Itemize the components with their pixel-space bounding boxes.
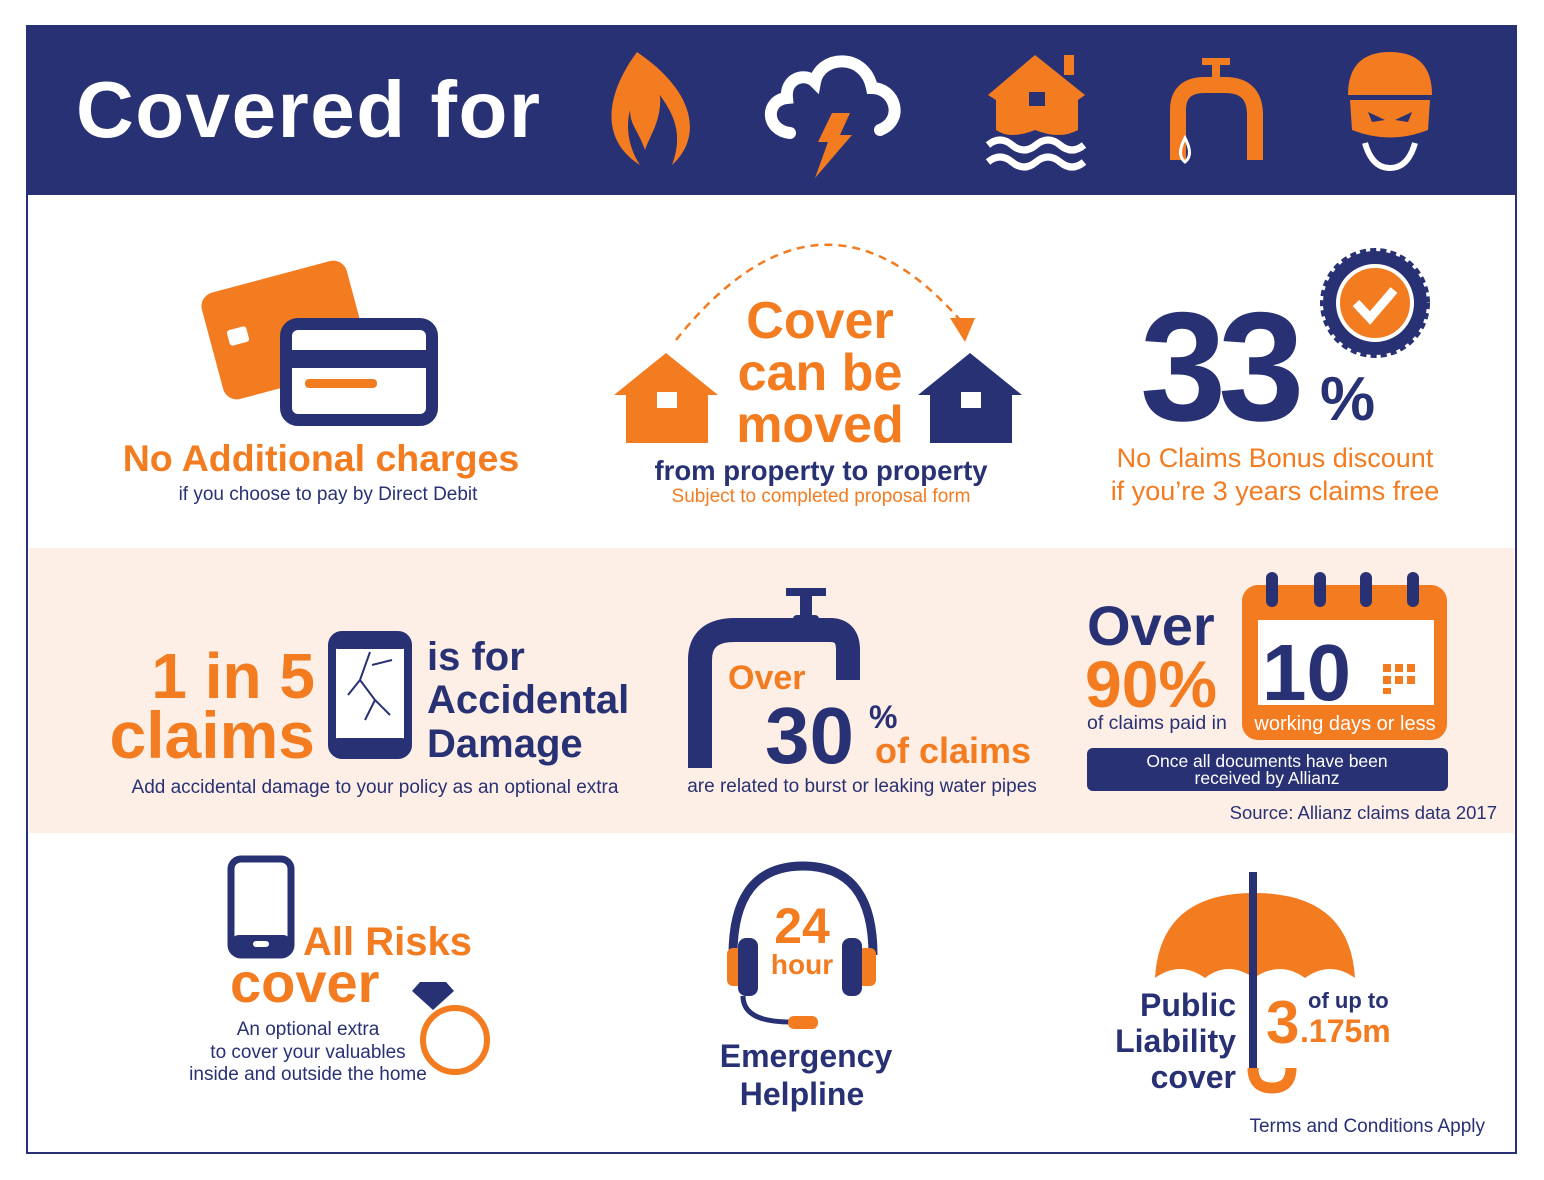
panel: 1 in 5 claims: Add accidental damage to your policy as an optional extra bbox=[132, 777, 619, 798]
panel: no additional charges bbox=[123, 257, 519, 505]
title: Covered for bbox=[76, 65, 541, 154]
arrow: dashed arc bbox=[676, 245, 975, 342]
panel: public liability: Public bbox=[1140, 987, 1236, 1023]
panel: cover can be moved: can be bbox=[738, 344, 902, 402]
icon: navy house bbox=[918, 353, 1022, 443]
callout: documents note: Once all documents have been bbox=[1146, 751, 1388, 771]
panel: over 90% paid in 10 days: Source: Allianz claims data 2017 bbox=[1230, 802, 1497, 823]
peach band bbox=[29, 548, 1514, 833]
panel: 33% no claims bonus bbox=[1111, 251, 1439, 506]
icon: diamond ring bbox=[412, 982, 487, 1072]
icon: calendar: working days or less bbox=[1253, 713, 1436, 735]
panel: 1 in 5 claims: 1 in 5 bbox=[151, 640, 315, 712]
panel: 1 in 5 claims: Damage bbox=[427, 722, 583, 766]
icon: orange house bbox=[614, 353, 718, 443]
panel: 33% no claims bonus: if you’re 3 years claims free bbox=[1111, 476, 1439, 506]
icon: burglar bbox=[1348, 52, 1432, 168]
panel: 30% of claims pipes: Over bbox=[728, 659, 806, 697]
panel: 30% of claims pipes: 30 bbox=[765, 691, 854, 780]
panel: 24 hour emergency helpline: Helpline bbox=[740, 1076, 864, 1112]
panel: public liability bbox=[1115, 872, 1485, 1137]
panel: all risks cover: All Risks bbox=[303, 920, 472, 964]
panel: 30% of claims pipes: are related to burst or leaking water pipes bbox=[687, 776, 1037, 797]
icon: umbrella bbox=[1155, 872, 1355, 1088]
panel: 30% of claims pipes: % bbox=[869, 699, 897, 735]
icon: headset bbox=[727, 866, 876, 1029]
panel: no additional charges: No Additional charges bbox=[123, 437, 519, 479]
header bbox=[27, 26, 1516, 195]
panel: public liability: of up to bbox=[1308, 988, 1389, 1013]
panel: cover can be moved: moved bbox=[736, 396, 904, 454]
panel: over 90% paid in 10 days: of claims paid in bbox=[1087, 712, 1227, 734]
panel: 1 in 5 claims: Accidental bbox=[427, 678, 629, 722]
icon: dripping tap bbox=[1178, 58, 1255, 162]
panel: 24 hour emergency helpline: Emergency bbox=[720, 1038, 892, 1074]
callout: documents note: received by Allianz bbox=[1195, 768, 1339, 788]
icon: cracked phone bbox=[332, 635, 408, 755]
panel: all risks cover: inside and outside the home bbox=[189, 1064, 427, 1085]
panel: over 90% paid in 10 days bbox=[1085, 572, 1497, 823]
panel: cover can be moved: Subject to completed proposal form bbox=[672, 486, 970, 507]
panel: all risks cover bbox=[189, 859, 487, 1085]
panel: 33% no claims bonus: No Claims Bonus discount bbox=[1117, 443, 1434, 473]
panel: 1 in 5 claims: claims bbox=[110, 698, 315, 772]
icon: tap pipe bbox=[700, 588, 848, 768]
panel: cover can be moved: from property to property bbox=[654, 455, 988, 486]
panel: cover can be moved: Cover bbox=[746, 292, 894, 350]
panel: 24 hour emergency helpline: 24 bbox=[774, 898, 830, 954]
panel: cover can be moved bbox=[614, 245, 1022, 507]
panel: public liability: cover bbox=[1151, 1059, 1236, 1095]
icon: calendar: 10 bbox=[1262, 628, 1351, 717]
panel: all risks cover: cover bbox=[230, 951, 379, 1014]
panel: over 90% paid in 10 days: 90% bbox=[1085, 647, 1217, 721]
panel: public liability: .175m bbox=[1300, 1013, 1391, 1049]
icon: credit cards bbox=[198, 257, 432, 420]
panel: no additional charges: if you choose to pay by Direct Debit bbox=[179, 484, 478, 505]
panel: public liability: Liability bbox=[1115, 1023, 1236, 1059]
panel: 24 hour emergency helpline bbox=[720, 866, 892, 1112]
panel: 1 in 5 claims: is for bbox=[427, 635, 525, 679]
panel: over 90% paid in 10 days: Over bbox=[1087, 594, 1215, 657]
icon: check badge bbox=[1323, 251, 1427, 355]
panel: public liability: 3 bbox=[1266, 989, 1299, 1056]
icon: storm cloud bbox=[771, 61, 895, 178]
panel: public liability: Terms and Conditions Apply bbox=[1249, 1116, 1485, 1137]
callout: documents note bbox=[1087, 748, 1448, 791]
icon: flooded house bbox=[988, 55, 1085, 167]
panel: 33% no claims bonus: % bbox=[1320, 365, 1375, 434]
panel: all risks cover: to cover your valuables bbox=[210, 1042, 406, 1063]
panel: 1 in 5 claims bbox=[110, 635, 629, 798]
panel: all risks cover: An optional extra bbox=[237, 1019, 380, 1040]
panel: 30% of claims pipes: of claims bbox=[875, 730, 1031, 771]
panel: 30% of claims pipes bbox=[687, 588, 1037, 797]
panel: 33% no claims bonus: 33 bbox=[1140, 280, 1299, 453]
icon: calendar bbox=[1242, 572, 1447, 740]
icon: phone bbox=[231, 859, 291, 955]
icon: flame bbox=[611, 52, 690, 165]
panel: 24 hour emergency helpline: hour bbox=[771, 949, 833, 980]
